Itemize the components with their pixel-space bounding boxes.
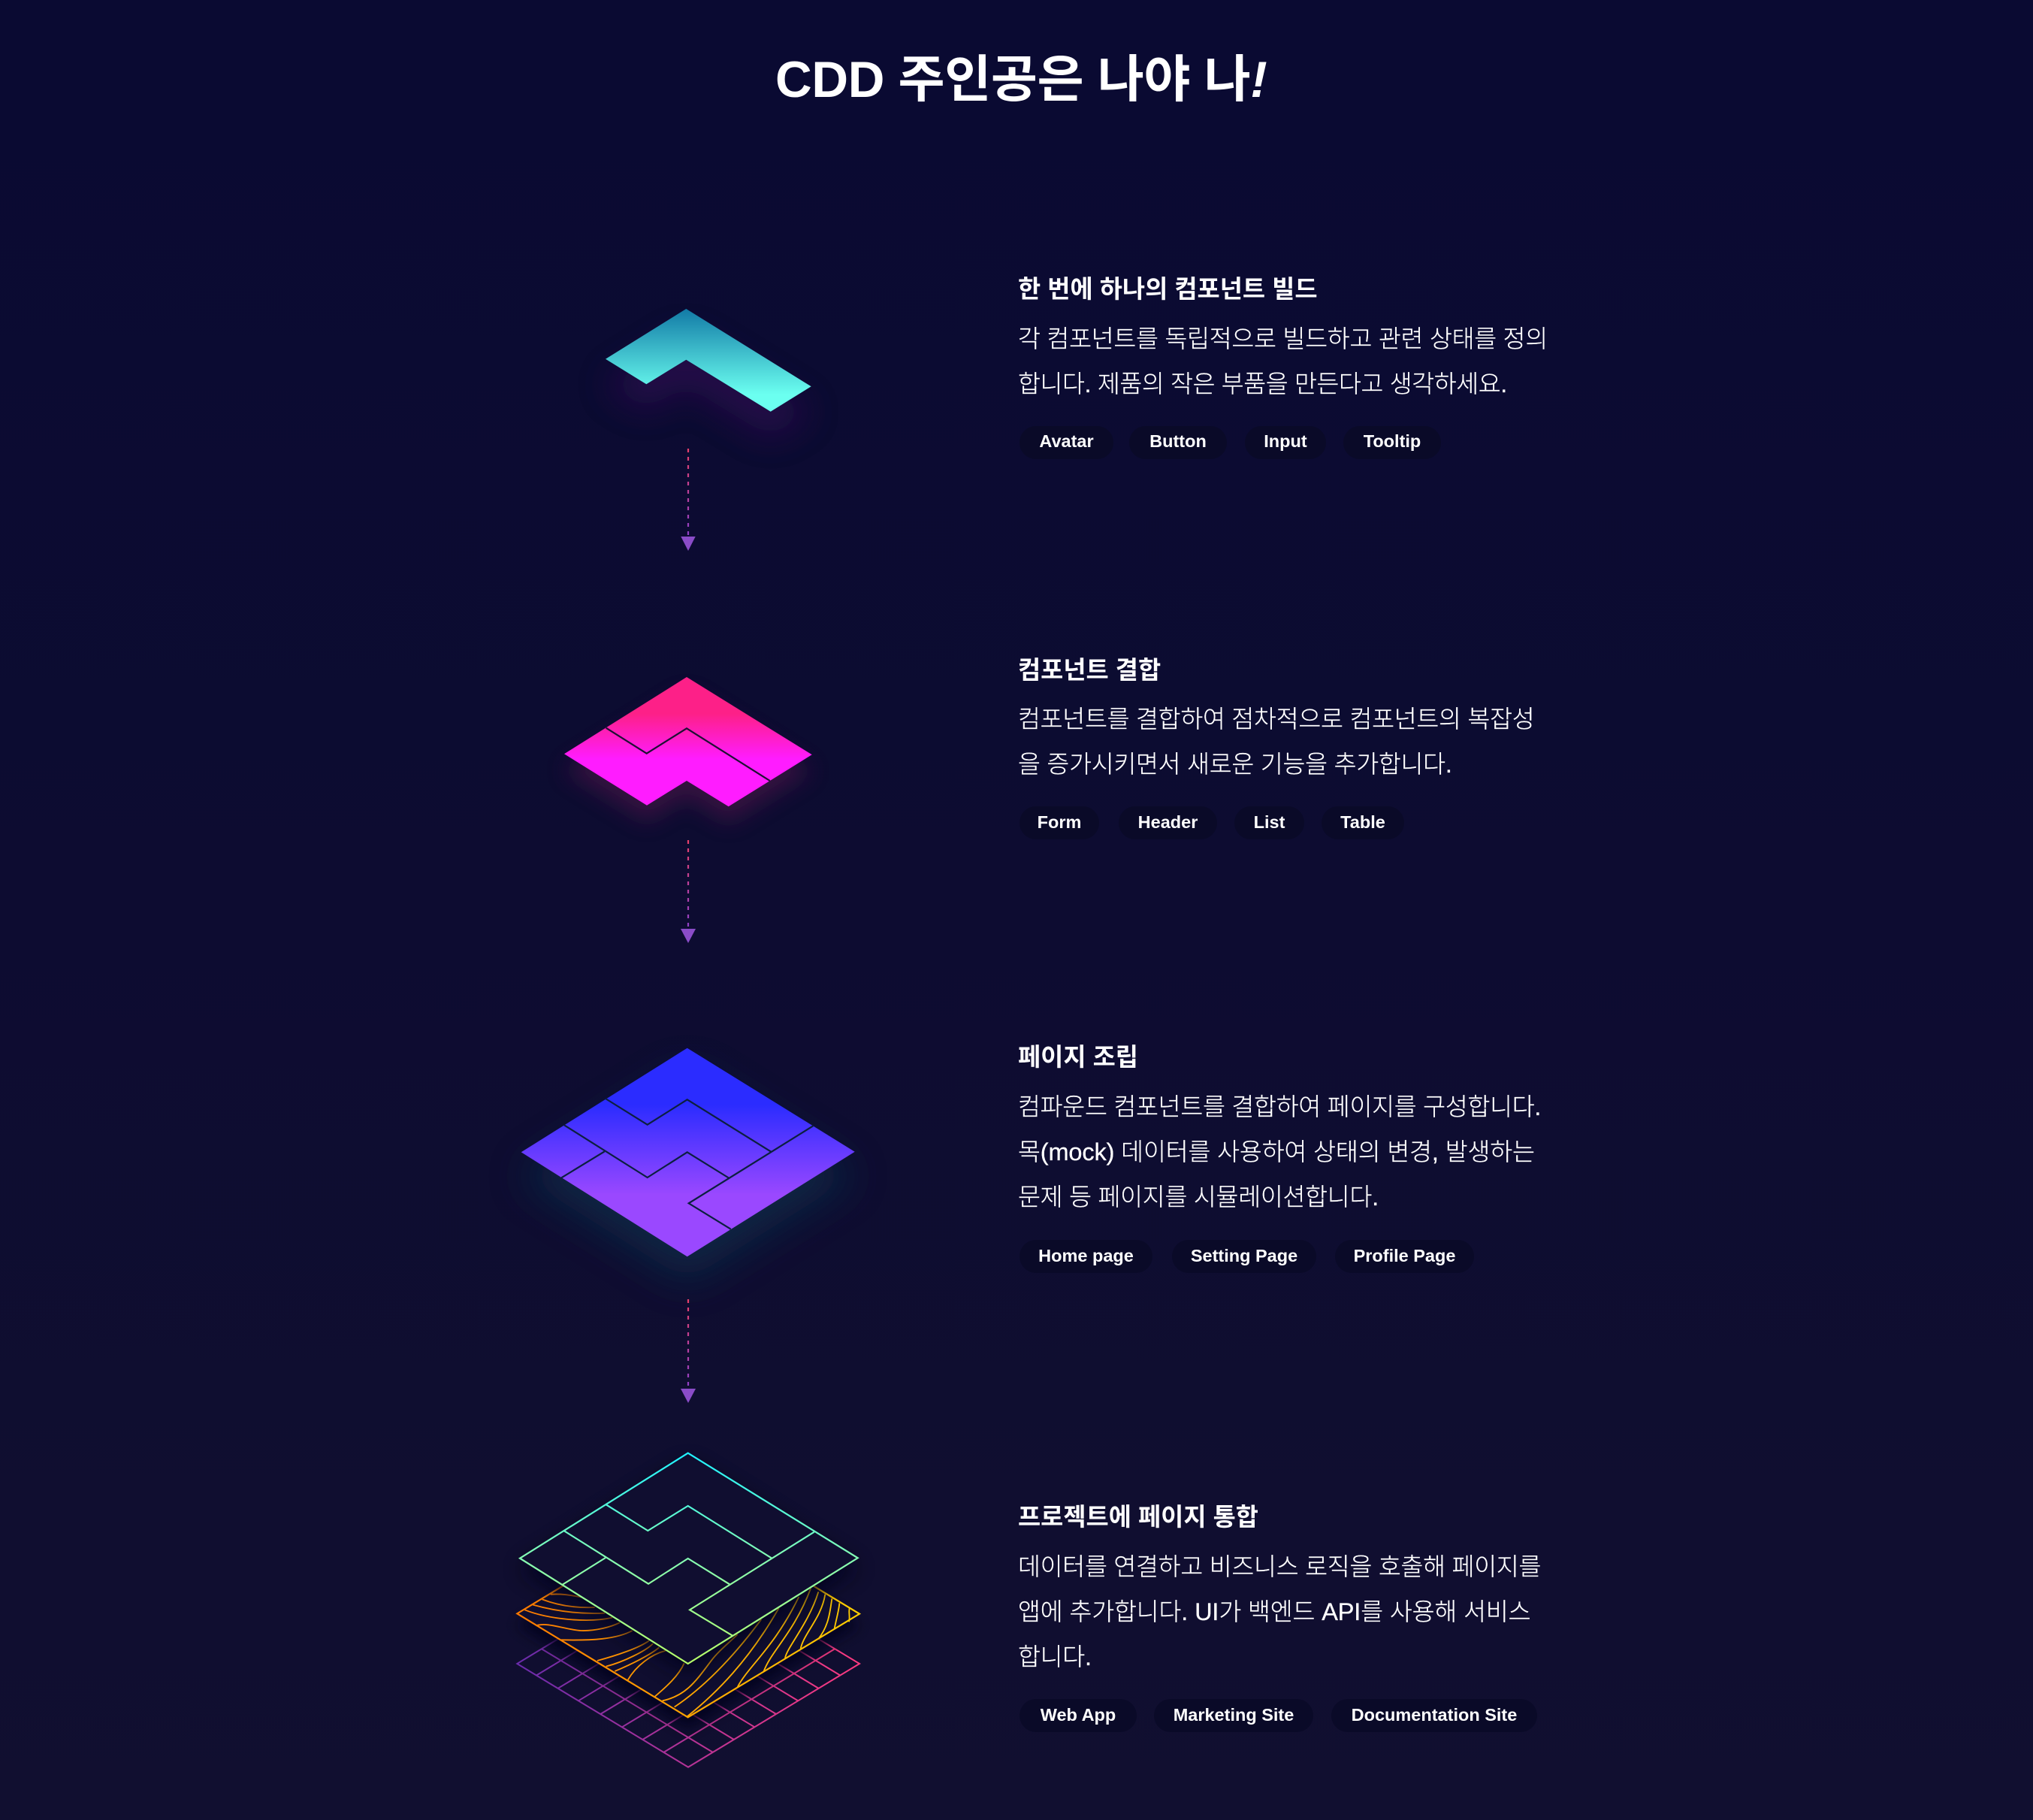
tags: step 1: Tooltip	[1364, 431, 1421, 451]
tags: step 4: Marketing Site	[1174, 1705, 1294, 1725]
text block: step 3 description: 컴파운드 컴포넌트를 결합하여 페이지를 구성합니다.	[1018, 1093, 1541, 1120]
text block: step 3 description: 문제 등 페이지를 시뮬레이션합니다.	[1018, 1184, 1379, 1211]
tags: step 2: Header	[1138, 812, 1198, 832]
tags: step 1: Button	[1149, 431, 1207, 451]
text block: step 1 description: 합니다. 제품의 작은 부품을 만든다고 생각하세요.	[1018, 370, 1507, 398]
text block: step 4 description: 앱에 추가합니다. UI가 백엔드 API를 사용해 서비스	[1018, 1598, 1530, 1625]
tags: step 2: Table	[1340, 812, 1385, 832]
tags: step 1: Input	[1264, 431, 1307, 451]
icon: combined components layer (magenta)	[564, 677, 812, 823]
tags: step 4: Web App	[1041, 1705, 1116, 1725]
layer: top outline of assembled components	[520, 1453, 858, 1674]
tags: step 2	[1020, 806, 1404, 839]
heading: step 3: 페이지 조립	[1018, 1043, 1138, 1071]
panel: step 1 text	[1018, 275, 1548, 459]
text block: step 2 description	[1018, 706, 1534, 778]
icon: single component layer (cyan)	[606, 309, 811, 437]
tags: step 3: Profile Page	[1354, 1246, 1455, 1265]
tags: step 1	[1020, 426, 1441, 459]
heading: step 1: 한 번에 하나의 컴포넌트 빌드	[1018, 275, 1318, 303]
tags: step 2: Form	[1038, 812, 1081, 832]
panel: step 2 text	[1018, 656, 1534, 839]
panel: step 4 text	[1018, 1503, 1541, 1732]
text block: step 2 description: 컴포넌트를 결합하여 점차적으로 컴포넌트의 복잡성	[1018, 706, 1534, 733]
layer: orange contour map	[517, 1510, 859, 1728]
text block: step 1 description	[1018, 325, 1548, 398]
text block: step 4 description: 합니다.	[1018, 1643, 1092, 1670]
tags: step 3	[1020, 1240, 1474, 1273]
heading: step 2: 컴포넌트 결합	[1018, 656, 1161, 684]
tags: step 4	[1020, 1699, 1537, 1732]
arrow: step 2 to step 3	[681, 840, 696, 943]
text block: step 4 description	[1018, 1553, 1541, 1670]
tags: step 3: Home page	[1038, 1246, 1134, 1265]
text block: step 3 description: 목(mock) 데이터를 사용하여 상태의 변경, 발생하는	[1018, 1138, 1535, 1165]
arrow: step 1 to step 2	[681, 449, 696, 551]
tags: step 1: Avatar	[1039, 431, 1094, 451]
title: CDD 주인공은 나야 나!	[775, 52, 1267, 108]
heading: step 4: 프로젝트에 페이지 통합	[1018, 1503, 1258, 1531]
text block: step 2 description: 을 증가시키면서 새로운 기능을 추가합니다.	[1018, 751, 1452, 778]
layer: purple-to-pink grid	[517, 1560, 859, 1767]
arrow: step 3 to step 4	[681, 1299, 696, 1403]
text block: step 3 description	[1018, 1093, 1541, 1211]
icon: assembled page layer (blue-violet)	[521, 1048, 855, 1280]
tags: step 4: Documentation Site	[1352, 1705, 1517, 1725]
icon: stacked integration layers	[517, 1453, 859, 1767]
text block: step 4 description: 데이터를 연결하고 비즈니스 로직을 호출해 페이지를	[1018, 1553, 1541, 1580]
text block: step 1 description: 각 컴포넌트를 독립적으로 빌드하고 관련 상태를 정의	[1018, 325, 1548, 352]
tags: step 3: Setting Page	[1191, 1246, 1297, 1265]
panel: step 3 text	[1018, 1043, 1541, 1273]
tags: step 2: List	[1254, 812, 1285, 832]
